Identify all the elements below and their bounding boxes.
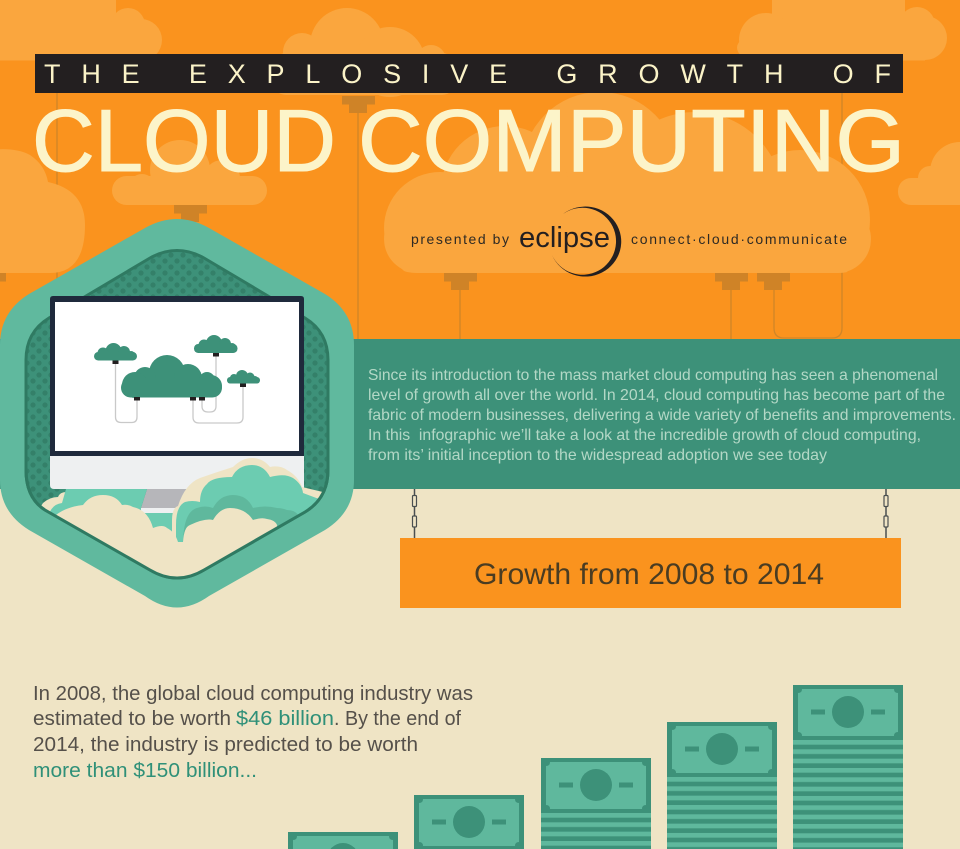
foreground clouds inside the hexagon: [42, 458, 322, 576]
intro paragraph: [368, 367, 956, 464]
intro paragraph: Since its introduction to the mass market cloud computing has seen a phenomenal: [368, 367, 938, 384]
intro paragraph: In this infographic we’ll take a look at the incredible growth of cloud computing,: [368, 427, 921, 444]
screen cloud top right: [194, 335, 238, 353]
money stack 3: [541, 758, 651, 849]
teal cloud right: [176, 465, 318, 542]
hexagon badge: [0, 219, 354, 608]
screen cloud main: [121, 355, 222, 398]
intro paragraph: from its’ initial inception to the widespread adoption we see today: [368, 447, 827, 464]
brackets: cloud plugs left: [0, 205, 207, 290]
monitor bezel: [50, 296, 304, 456]
cloud: large central logo cloud: [384, 92, 871, 290]
body text: . By the end of: [334, 708, 461, 730]
screen cloud left: [94, 343, 137, 360]
cloud: top left: [0, 0, 162, 61]
intro paragraph: level of growth all over the world. In 2014, cloud computing has become part of the: [368, 387, 945, 404]
cream cloud right front: [183, 508, 278, 574]
eclipse logo: eclipse: [519, 222, 610, 254]
body text: more than $150 billion...: [33, 760, 257, 782]
screen cloud small right: [227, 370, 260, 384]
money stack 1: [288, 832, 398, 849]
body text: estimated to be worth: [33, 708, 231, 730]
orange sign: [400, 538, 901, 608]
hexagon dotted interior: [26, 250, 328, 578]
far left cream cloud: [42, 492, 66, 512]
presented by label: presented by: [411, 231, 509, 247]
cream cloud right back: [172, 458, 322, 537]
mid teal cloud right: [183, 495, 298, 538]
cloud: small centre left: [112, 140, 267, 205]
sign heading: Growth from 2008 to 2014: [474, 558, 824, 591]
background: cream lower page: [0, 489, 960, 849]
monitor: [50, 296, 304, 508]
body text: In 2008, the global cloud computing industry was: [33, 683, 473, 705]
screen wires: [116, 354, 243, 423]
cable network behind clouds: [57, 93, 842, 340]
screen cable plugs: [112, 353, 246, 400]
cloud plugs: [342, 96, 790, 290]
tagline: connect·cloud·communicate: [631, 231, 847, 247]
cloud: far left: [0, 149, 85, 273]
eclipse logo: [519, 207, 621, 277]
title line 2: computing: COMPUTING: [358, 91, 905, 190]
cloud: right edge: [898, 142, 960, 205]
body text: 2014, the industry is predicted to be worth: [33, 734, 418, 756]
body text: $46 billion: [236, 708, 334, 730]
cloud: top centre: [272, 8, 456, 97]
title line 1: THE EXPLOSIVE GROWTH OF: [44, 59, 891, 89]
hanging sign chains: [412, 489, 888, 538]
hexagon lower inner border: [26, 470, 328, 578]
money stack 5: [793, 685, 903, 849]
money stack 4: [667, 722, 777, 849]
teal intro band: [0, 339, 960, 489]
monitor stand: [141, 489, 205, 508]
title line 2: cloud: CLOUD: [32, 91, 336, 190]
black title banner: [35, 54, 903, 93]
background: orange sky: [0, 0, 960, 340]
monitor chin: [50, 456, 304, 489]
money stack 2: [414, 795, 524, 849]
intro paragraph: fabric of modern businesses, delivering a wide variety of benefits and improvements.: [368, 407, 956, 424]
cloud: top right: [737, 0, 947, 67]
body text: [33, 683, 473, 782]
monitor screen: [55, 302, 299, 451]
hexagon outer ring: [0, 219, 354, 608]
cream cloud left: [56, 495, 178, 576]
teal cloud behind stand: [50, 489, 173, 532]
monitor stand base: [141, 508, 175, 513]
